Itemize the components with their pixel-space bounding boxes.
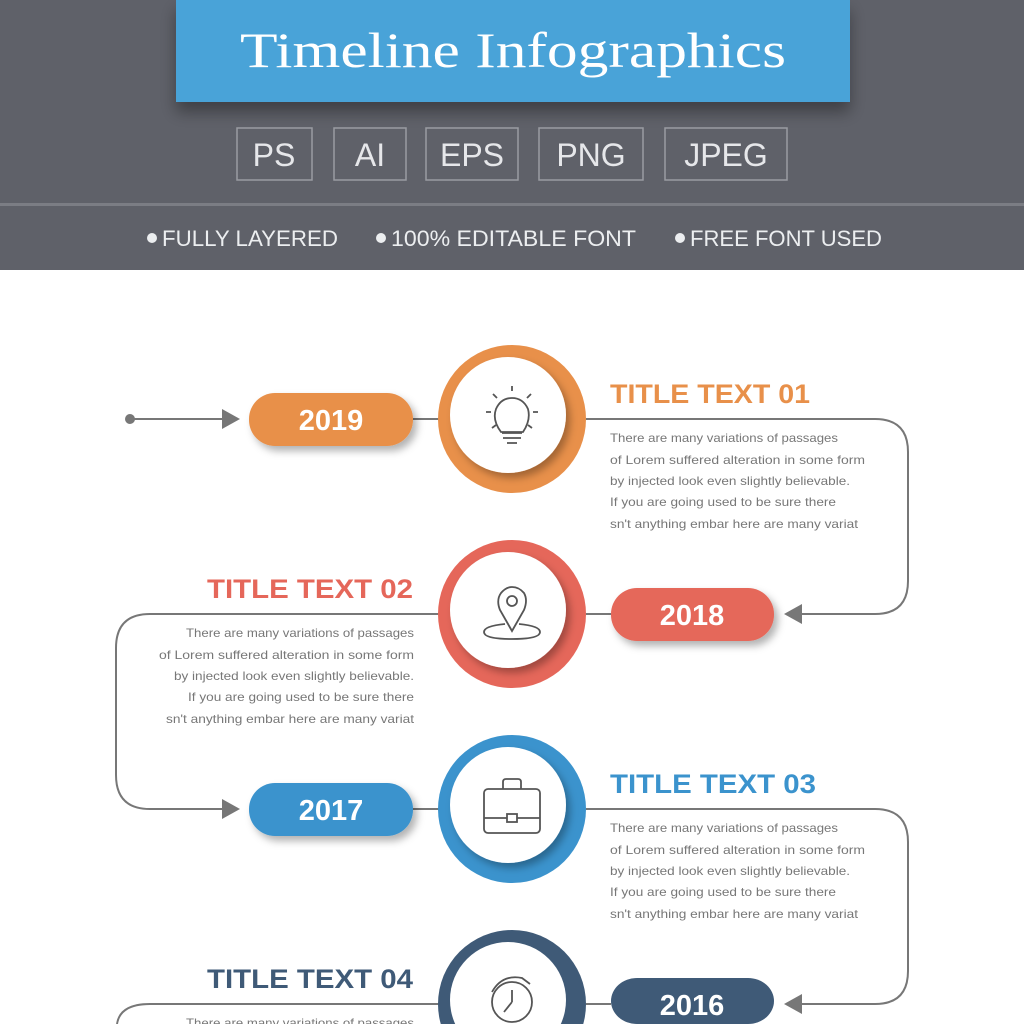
title banner xyxy=(176,0,850,102)
step 2: 2018 xyxy=(660,600,724,632)
step 3: of Lorem suffered alteration in some form xyxy=(610,843,865,857)
format badges: AI xyxy=(355,137,385,173)
step 3: by injected look even slightly believable. xyxy=(610,864,850,878)
arrows xyxy=(222,409,802,1014)
step 4 xyxy=(186,930,774,1024)
step 1: 2019 xyxy=(299,405,363,437)
step 2: of Lorem suffered alteration in some form xyxy=(159,648,414,662)
step 1: by injected look even slightly believable. xyxy=(610,474,850,488)
step 1: TITLE TEXT 01 xyxy=(610,379,810,409)
format badges xyxy=(237,128,787,180)
step 3: If you are going used to be sure there xyxy=(610,885,836,899)
step 3: 2017 xyxy=(299,795,363,827)
step 2 xyxy=(159,540,774,726)
format badges: JPEG xyxy=(684,137,768,173)
step 2: by injected look even slightly believable. xyxy=(174,669,414,683)
step 2: There are many variations of passages xyxy=(186,626,414,640)
step 1: of Lorem suffered alteration in some form xyxy=(610,453,865,467)
step 1 xyxy=(249,345,865,531)
feature bullets: FREE FONT USED xyxy=(690,226,882,251)
step 3: There are many variations of passages xyxy=(610,821,838,835)
feature bullets: 100% EDITABLE FONT xyxy=(391,226,636,251)
feature bullets: FULLY LAYERED xyxy=(162,226,338,251)
step 1: If you are going used to be sure there xyxy=(610,495,836,509)
step 2: sn't anything embar here are many variat xyxy=(166,712,415,726)
step 4: 2016 xyxy=(660,990,724,1022)
feature bullets xyxy=(147,226,882,251)
step 1: There are many variations of passages xyxy=(610,431,838,445)
step 2: If you are going used to be sure there xyxy=(188,690,414,704)
timeline path xyxy=(116,414,908,1024)
step 3: TITLE TEXT 03 xyxy=(610,769,816,799)
step 1: sn't anything embar here are many variat xyxy=(610,517,859,531)
format badges: PNG xyxy=(556,137,626,173)
step 2: TITLE TEXT 02 xyxy=(207,574,413,604)
format badges: EPS xyxy=(440,137,504,173)
step 3: sn't anything embar here are many variat xyxy=(610,907,859,921)
title banner: Timeline Infographics xyxy=(240,22,786,78)
format badges: PS xyxy=(253,137,295,173)
step 4: TITLE TEXT 04 xyxy=(207,964,413,994)
step 3 xyxy=(249,735,865,921)
header band xyxy=(0,0,1024,270)
